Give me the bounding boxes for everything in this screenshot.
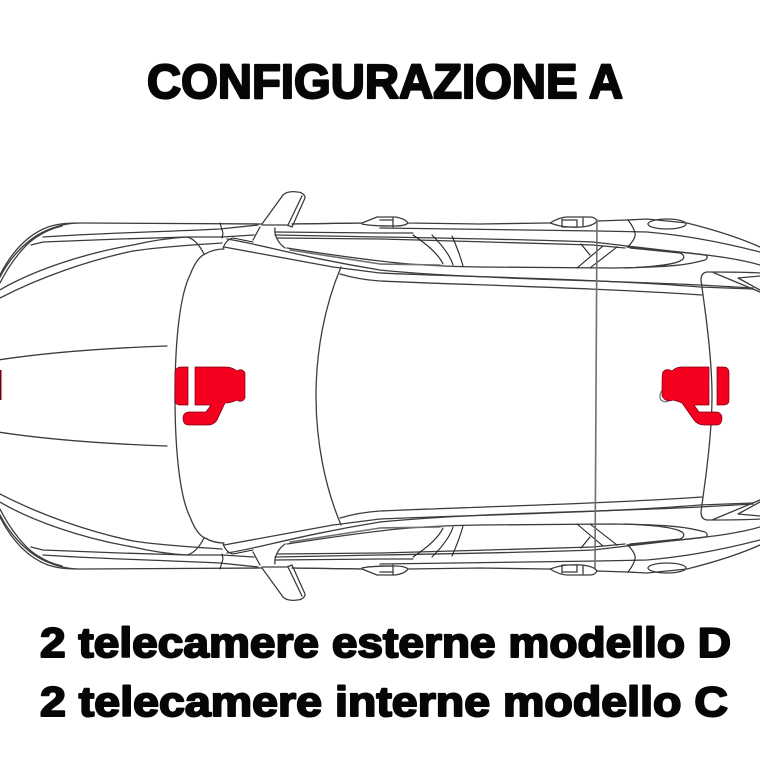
title: CONFIGURAZIONE A [147, 56, 623, 109]
door handle oval [648, 219, 686, 229]
caption line 2: 2 telecamere interne modello C [40, 678, 728, 725]
car top-view line drawing [0, 192, 760, 600]
car upper half outline [0, 192, 760, 396]
side mirror [253, 192, 305, 248]
caption line 1: 2 telecamere esterne modello D [40, 619, 731, 666]
camera icon: front [175, 367, 245, 425]
camera icon: rear [660, 367, 729, 425]
rear window [701, 272, 760, 396]
door handles [292, 217, 760, 247]
centre pillar line [595, 220, 597, 568]
car lower half outline [0, 396, 760, 600]
window struts [413, 235, 617, 268]
camera icon cut-off at left edge [0, 370, 2, 400]
